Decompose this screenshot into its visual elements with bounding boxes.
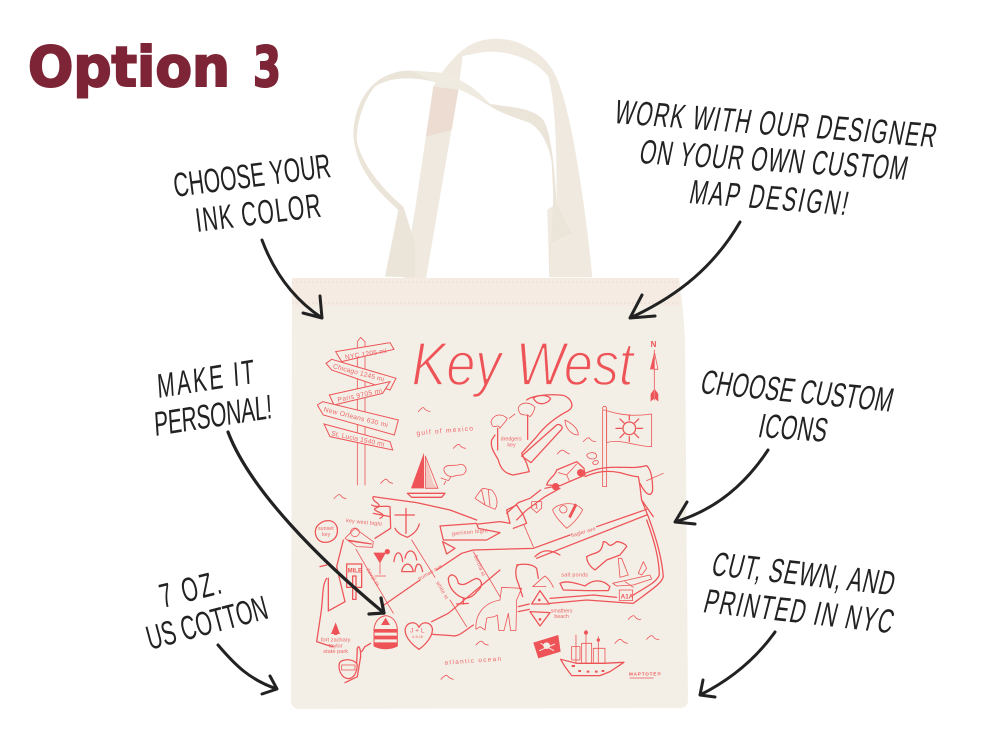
us 1 shield: 1 xyxy=(535,504,539,511)
cloud island and fish xyxy=(441,464,466,485)
waves xyxy=(441,616,659,679)
callout: choose your ink color xyxy=(171,146,333,239)
callout: custom map design xyxy=(611,94,940,223)
arrow: custom map design xyxy=(630,222,740,318)
signpost: NYC 1205 mi xyxy=(345,348,388,361)
label: fort zachary: state park xyxy=(323,649,348,655)
callout: cut, sewn, printed xyxy=(700,546,899,641)
garrison bight xyxy=(440,505,527,554)
callout: choose your ink color: INK COLOR xyxy=(193,186,323,239)
pirate flag xyxy=(533,635,561,658)
streets: duval st xyxy=(364,567,380,588)
label: fort zachary: taylor xyxy=(329,643,343,649)
label: atlantic ocean: atlantic ocean xyxy=(444,656,502,667)
arrow: printed in nyc xyxy=(700,632,775,697)
arrow: us cotton xyxy=(218,645,277,694)
map print, lower half xyxy=(315,500,663,683)
callout: custom map design: WORK WITH OUR DESIGNER xyxy=(611,94,940,155)
waves xyxy=(334,407,596,499)
dredgers key xyxy=(491,395,578,475)
fort coast xyxy=(317,540,345,645)
heart xyxy=(405,623,432,649)
snorkel mask xyxy=(339,647,361,683)
callout: make it personal: PERSONAL! xyxy=(153,388,273,444)
sunset key xyxy=(315,521,337,542)
streets: truman ave xyxy=(417,564,443,582)
signpost: St. Lucia 1540 mi xyxy=(331,430,385,449)
callout: choose your ink color: CHOOSE YOUR xyxy=(171,146,333,204)
a1a sign xyxy=(619,590,634,601)
north arrow: N xyxy=(651,340,657,349)
arrow: make it personal xyxy=(228,432,384,614)
signpost: New Orleans 630 mi xyxy=(323,406,389,429)
label: fort zachary: fort zachary xyxy=(321,637,351,643)
cocktail xyxy=(373,549,390,576)
sailboat xyxy=(407,453,445,497)
callout: choose custom icons xyxy=(697,364,897,450)
callout: 7 oz us cotton: US COTTON xyxy=(142,588,272,657)
callout: 7 oz us cotton: 7 OZ. xyxy=(155,563,225,615)
streets xyxy=(356,509,647,627)
airplane xyxy=(613,558,652,587)
pie slice xyxy=(345,528,373,547)
coastline xyxy=(507,466,653,513)
label: smathers beach: beach xyxy=(554,614,569,620)
signpost xyxy=(317,337,398,485)
title: Option xyxy=(28,35,230,99)
baseball xyxy=(553,503,583,528)
dredgers key: dredgers xyxy=(501,436,522,442)
callout: choose custom icons: ICONS xyxy=(755,408,831,450)
east coast xyxy=(550,500,663,603)
west coast line xyxy=(372,505,391,538)
garrison bight: garrison bight xyxy=(452,528,489,537)
six toed arches xyxy=(394,551,423,572)
arrow: ink color xyxy=(262,240,322,318)
label: key west bight: key west bight xyxy=(346,518,383,528)
shell xyxy=(475,488,497,509)
us 1 shield xyxy=(532,502,542,513)
dog xyxy=(476,587,522,631)
label: smathers beach: smathers xyxy=(551,608,573,614)
callout: cut, sewn, printed: CUT, SEWN, AND xyxy=(708,546,899,603)
callout: cut, sewn, printed: PRINTED IN NYC xyxy=(700,583,898,641)
flag xyxy=(603,406,652,487)
streets: flagler ave xyxy=(570,526,596,539)
car xyxy=(547,453,598,490)
heart: J + L xyxy=(410,627,425,634)
callout: make it personal xyxy=(153,353,273,444)
pirate ship xyxy=(561,630,624,676)
signpost: Chicago 1245 mi xyxy=(332,363,385,384)
streets: white st xyxy=(434,581,449,601)
tote bag body xyxy=(291,278,688,709)
title: 3 xyxy=(253,35,281,99)
callout: choose custom icons: CHOOSE CUSTOM xyxy=(697,364,897,420)
heading: Key West: Key West xyxy=(412,330,636,399)
mile marker: MILE xyxy=(348,569,362,575)
tote bag handles xyxy=(353,39,592,278)
salt ponds xyxy=(560,542,627,591)
salt ponds: salt ponds xyxy=(561,573,588,579)
rooster xyxy=(448,575,481,604)
map print, upper half xyxy=(317,330,663,528)
signpost: Paris 9705 mi xyxy=(337,388,383,404)
mile marker xyxy=(347,564,362,599)
callout: custom map design: MAP DESIGN! xyxy=(686,174,852,223)
pine tree xyxy=(331,622,340,635)
callout: custom map design: ON YOUR OWN CUSTOM xyxy=(636,133,911,188)
sunset key: sunset xyxy=(318,526,334,532)
north arrow xyxy=(650,340,658,402)
maptote logo xyxy=(629,670,661,678)
bikini xyxy=(530,576,553,626)
maptote logo: MAPTOTE® xyxy=(629,670,661,676)
streets: bertha st xyxy=(472,554,486,578)
arrow: choose custom icons xyxy=(675,450,768,524)
heart: 6-9-16 xyxy=(412,635,423,639)
dredgers key: key xyxy=(507,443,516,449)
label: gulf of mexico: gulf of mexico xyxy=(416,425,474,437)
callout: make it personal: MAKE IT xyxy=(156,353,255,406)
sunset key: key xyxy=(322,532,331,538)
a1a sign: A1A xyxy=(621,593,634,600)
anchor xyxy=(395,508,419,537)
buoy xyxy=(374,616,397,649)
